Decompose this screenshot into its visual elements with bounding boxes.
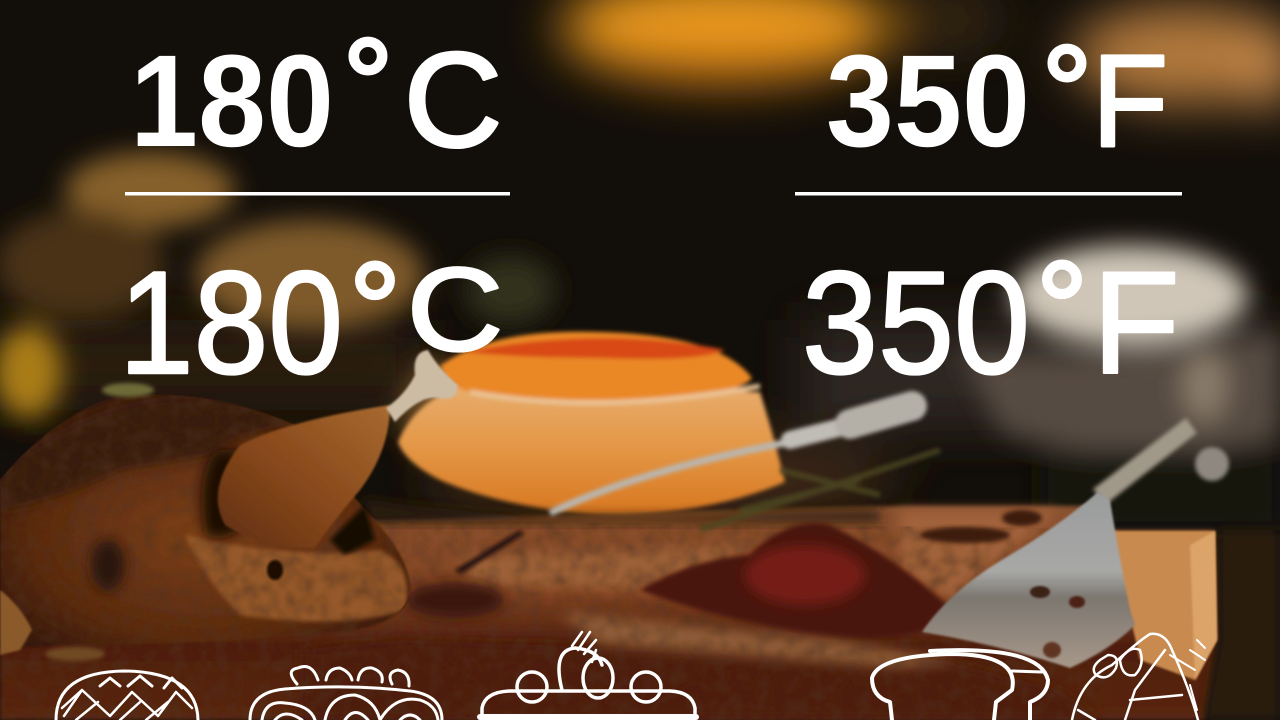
temperature: 350°F regular: ° bbox=[1036, 234, 1088, 380]
icon: bread loaf bbox=[872, 650, 1048, 720]
temperature: 350°F regular bbox=[802, 234, 1180, 404]
temperature: 350°F bold: ° bbox=[1042, 21, 1092, 160]
icon: lattice pie bbox=[56, 671, 198, 720]
orange pastry bbox=[398, 332, 785, 517]
icon: swiss roll cake bbox=[250, 666, 442, 720]
background glow: warm kitchen lights bbox=[0, 0, 1280, 530]
divider right bbox=[795, 192, 1182, 196]
temperature: 350°F bold bbox=[826, 21, 1168, 174]
icon: fruit tart bbox=[480, 632, 696, 717]
temperature: 180°C bold bbox=[130, 14, 502, 175]
blurred herbs bbox=[700, 450, 940, 530]
divider left bbox=[125, 192, 510, 196]
temperature: 350°F bold: 350 bbox=[826, 27, 1030, 174]
icon: croissant or pastry sketch bbox=[1072, 634, 1205, 720]
spice pile bbox=[640, 523, 952, 638]
temperature: 180°C regular: C bbox=[407, 244, 503, 376]
roast chicken bbox=[0, 350, 458, 661]
fork handle bbox=[550, 406, 912, 513]
temperature: 180°C bold: ° bbox=[343, 14, 393, 153]
dark table edge behind pastry bbox=[360, 498, 880, 522]
temperature: 350°F bold: F bbox=[1092, 27, 1168, 174]
icon row: baked goods line art bbox=[56, 632, 1205, 720]
temperature: 180°C bold: 180 bbox=[130, 27, 334, 174]
temperature: 350°F regular: 350 bbox=[802, 241, 1030, 404]
temperature: 180°C regular bbox=[119, 235, 503, 404]
temperature: 180°C regular: 180 bbox=[119, 241, 343, 404]
temperature: 180°C bold: C bbox=[404, 26, 502, 175]
temperature: 180°C regular: ° bbox=[349, 235, 401, 381]
wooden table bbox=[0, 500, 1280, 720]
spoon bbox=[922, 425, 1229, 668]
table texture bbox=[173, 522, 1078, 715]
temperature: 350°F regular: F bbox=[1092, 241, 1180, 404]
blurred white bowl right bbox=[960, 245, 1280, 530]
blurred vegetables left bbox=[0, 152, 555, 460]
